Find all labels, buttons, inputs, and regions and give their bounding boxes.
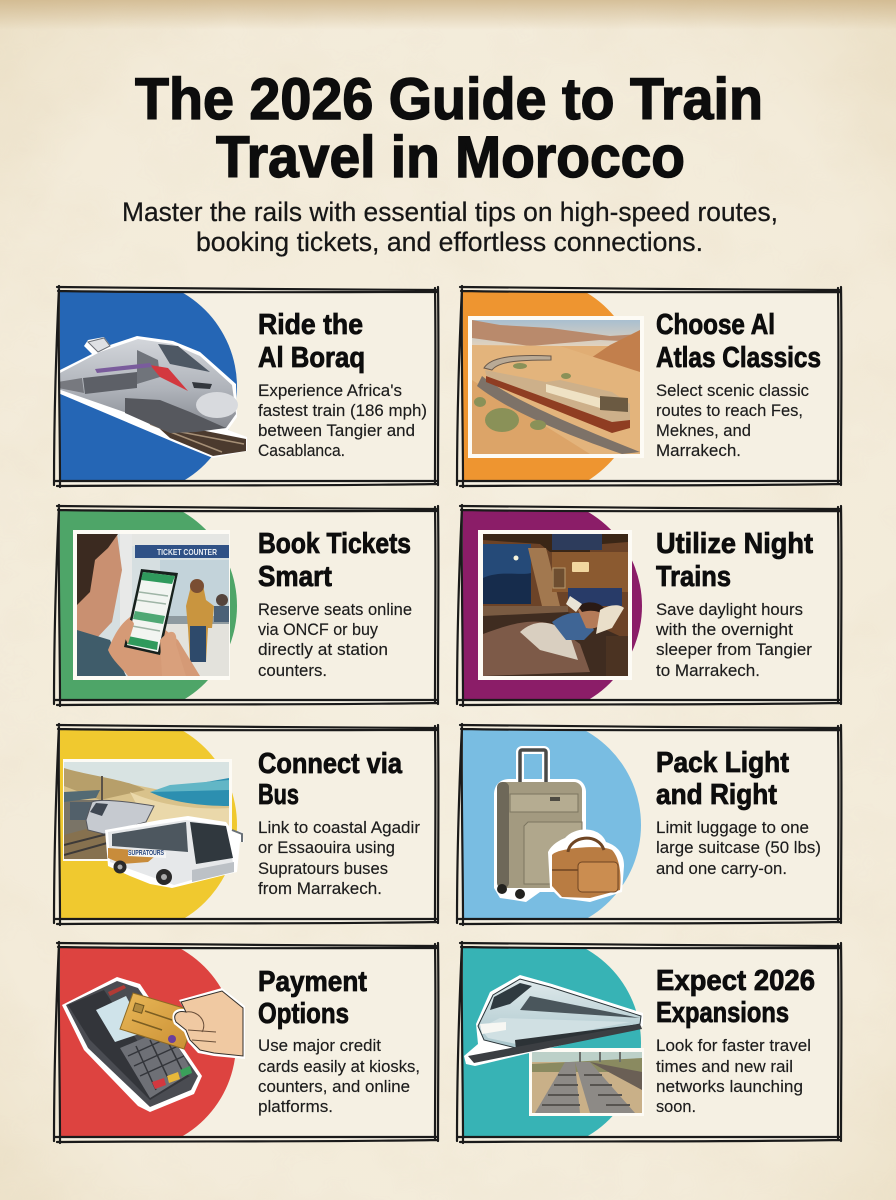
description: Link to coastal Agadir [258,818,420,837]
description: Marrakech. [656,441,741,460]
heading: Pack Light [656,747,789,779]
photo: new rail line [529,1048,644,1116]
heading: Payment [258,966,367,998]
heading [656,965,815,1029]
heading [258,309,365,374]
heading: Book Tickets [258,528,411,560]
panel: payment options [52,940,440,1144]
colour shape: purple [463,511,642,699]
description: Experience Africa's [258,381,402,400]
description: with the overnight [655,620,793,639]
panel: pack light and right [456,722,842,926]
title [135,67,763,190]
icon: suitcase [494,750,590,902]
photo: coastal station [63,759,232,861]
panel: choose Al Atlas classics [456,284,842,488]
subtitle: booking tickets, and effortless connections. [196,227,703,257]
description: Casablanca. [258,441,345,460]
photo: desert train [468,316,644,458]
icon: modern bullet train [464,975,643,1066]
colour shape: blue [60,292,237,480]
sketch frame [457,505,841,706]
description: Limit luggage to one [656,818,809,837]
description: to Marrakech. [656,661,760,680]
heading: Al Boraq [258,342,365,374]
description: Supratours buses [258,859,388,878]
heading: Connect via [258,748,403,780]
icon: credit card [120,993,197,1049]
photo: booking on phone at ticket counter [73,530,230,680]
heading: Trains [656,561,731,593]
heading [258,748,403,811]
subtitle: Master the rails with essential tips on high-speed routes, [122,197,778,227]
description: cards easily at kiosks, [258,1057,420,1076]
title: Travel in Morocco [216,125,685,190]
colour shape: orange [463,292,614,480]
panel: expect 2026 expansions [456,940,842,1144]
heading [656,309,821,374]
heading: and Right [656,779,777,811]
colour shape: light blue [463,730,641,918]
icon: coach bus: SUPRATOURS [128,850,164,857]
title: The 2026 Guide to Train [135,67,763,132]
heading [258,528,411,593]
colour shape: red [60,948,235,1136]
heading: Ride the [258,309,363,341]
sketch frame [54,942,438,1143]
heading [656,747,789,811]
sketch frame [457,724,841,925]
icon: hand [172,988,245,1059]
heading: Expect 2026 [656,965,815,997]
icon: card terminal [62,977,202,1112]
heading: Smart [258,561,332,593]
description: Save daylight hours [656,600,803,619]
sketch frame [457,942,841,1143]
sketch frame [54,505,438,706]
sketch frame [54,724,438,925]
panel: ride the Al Boraq [52,284,440,488]
photo: booking on phone at ticket counter: TICKET COUNTER [157,547,217,557]
description [656,1036,811,1116]
description: and one carry-on. [656,859,787,878]
icon: coach bus [105,816,244,888]
colour shape: green [60,511,237,699]
panel: utilize night trains [456,504,842,708]
description: large suitcase (50 lbs) [656,838,821,857]
icon: high-speed train [58,336,247,458]
heading: Utilize Night [656,528,813,560]
description: Look for faster travel [656,1036,811,1055]
description [655,600,812,680]
description: counters, and online [258,1077,410,1096]
description: times and new rail [656,1057,793,1076]
heading: Atlas Classics [656,342,821,374]
description: from Marrakech. [258,879,382,898]
heading: Bus [258,779,299,811]
description: networks launching [656,1077,803,1096]
description: Use major credit [258,1036,381,1055]
icon: carry-on bag [548,829,624,902]
description: via ONCF or buy [258,620,378,639]
description: sleeper from Tangier [656,640,812,659]
description [656,381,809,460]
heading [656,528,813,593]
panel: connect via bus [52,722,440,926]
description [258,1036,420,1116]
subtitle [122,197,778,257]
description: counters. [258,661,327,680]
heading: Options [258,998,349,1030]
description: or Essaouira using [258,838,395,857]
description: fastest train (186 mph) [258,401,427,420]
colour shape: teal [463,948,641,1136]
description: directly at station [258,640,388,659]
colour shape: yellow [60,730,237,918]
heading [258,966,367,1030]
photo: sleeper cabin at night [478,530,632,680]
description: soon. [656,1097,696,1116]
description: between Tangier and [258,421,415,440]
description [656,818,821,878]
description [258,381,427,460]
description: Reserve seats online [258,600,412,619]
description [258,818,420,898]
description: platforms. [258,1097,333,1116]
heading: Choose Al [656,309,775,341]
description: Meknes, and [656,421,751,440]
sketch frame [54,286,438,487]
heading: Expansions [656,997,789,1029]
panel: book tickets smart [52,504,440,708]
sketch frame [457,286,841,487]
description: Select scenic classic [656,381,809,400]
description [258,600,412,680]
description: routes to reach Fes, [656,401,803,420]
